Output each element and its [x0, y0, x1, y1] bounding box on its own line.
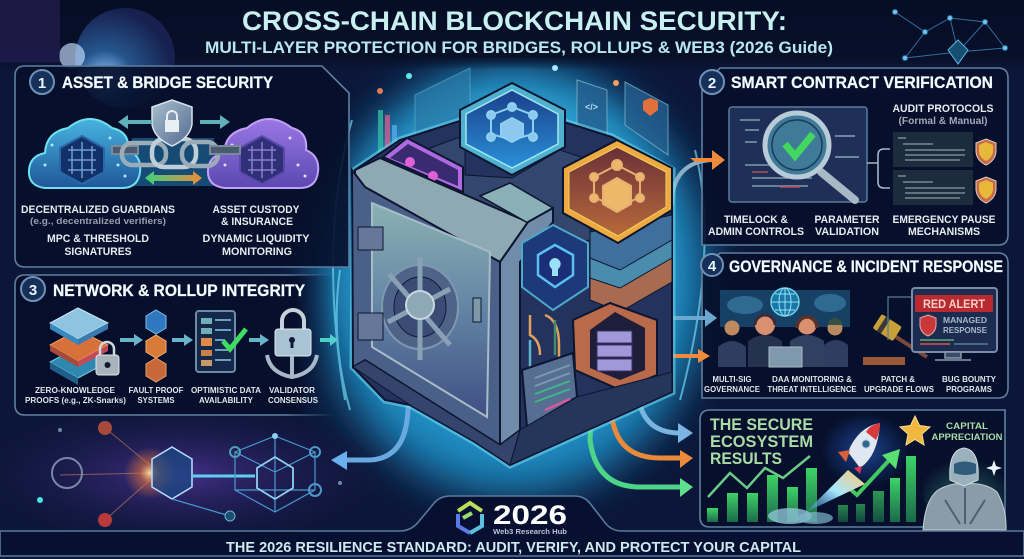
icon: gavel	[863, 314, 927, 365]
label: DAA monitoring and threat intelligence: THREAT INTELLIGENCE	[768, 384, 857, 394]
code box bottom	[893, 170, 973, 205]
label: emergency pause mechanisms: EMERGENCY PAUSE	[892, 214, 996, 226]
label: dynamic liquidity monitoring: MONITORING	[222, 246, 292, 258]
arrow: orange to results	[611, 405, 693, 468]
label: zero-knowledge proofs	[25, 385, 126, 405]
label: capital appreciation: APPRECIATION	[932, 432, 1003, 443]
label: timelock and admin controls: ADMIN CONTROLS	[708, 226, 804, 238]
label: decentralized guardians: (e.g., decentralized verifiers)	[30, 216, 166, 227]
hub name: Web3 Research Hub	[493, 527, 567, 536]
icon: red alert monitor	[888, 288, 997, 360]
decoration: background screens above vault	[377, 65, 668, 160]
icon: shield with padlock	[152, 100, 192, 146]
label: decentralized guardians: DECENTRALIZED GUARDIANS	[21, 204, 175, 216]
vault side	[500, 208, 553, 445]
decoration: background screens above vault: </>	[585, 102, 598, 112]
label: bug bounty programs	[942, 374, 996, 394]
wires	[530, 315, 559, 370]
label: fault proof systems: FAULT PROOF	[128, 385, 184, 395]
label: asset custody and insurance: ASSET CUSTODY	[212, 204, 300, 216]
arrow	[249, 334, 269, 346]
hinges	[358, 227, 481, 340]
bottom-left network art	[37, 421, 342, 527]
label: optimistic data availability	[191, 385, 261, 405]
heading: RESULTS	[710, 449, 782, 468]
logo	[458, 500, 567, 536]
icon: armored knight	[923, 448, 1006, 530]
icon: blue cloud	[29, 119, 140, 188]
heading: NETWORK & ROLLUP INTEGRITY	[53, 282, 305, 300]
badge 2: 2	[708, 75, 716, 92]
label: dynamic liquidity monitoring: DYNAMIC LIQUIDITY	[202, 233, 310, 245]
arrow	[120, 334, 143, 346]
label: bug bounty programs: PROGRAMS	[946, 384, 992, 394]
arrow: green to results	[583, 388, 693, 497]
arrow: blue to results	[640, 405, 693, 443]
label: patch and upgrade flows: PATCH &	[881, 374, 915, 384]
arrow: green and orange double	[145, 171, 202, 185]
label: audit protocols: AUDIT PROTOCOLS	[892, 103, 994, 115]
label: dynamic liquidity monitoring	[202, 233, 310, 258]
control panel	[522, 353, 577, 427]
badge 1: 1	[38, 75, 46, 92]
arrow: blue to bottom-left	[331, 405, 408, 470]
label: emergency pause mechanisms: MECHANISMS	[908, 226, 980, 238]
vault silhouette	[353, 105, 672, 465]
panel: smart contract verification	[700, 68, 1008, 245]
footer text: THE 2026 RESILIENCE STANDARD: AUDIT, VERIFY, AND PROTECT YOUR CAPITAL	[226, 539, 801, 556]
panel: governance and incident response	[701, 253, 1008, 398]
label: zero-knowledge proofs: PROOFS (e.g., ZK-Snarks)	[25, 395, 126, 405]
trend line left	[708, 456, 810, 497]
icon: shield top	[976, 139, 996, 165]
icon: checklist document	[196, 311, 246, 372]
title: CROSS-CHAIN BLOCKCHAIN SECURITY:	[242, 6, 787, 36]
label: capital appreciation	[932, 421, 1003, 443]
orange hexagon	[563, 140, 672, 243]
icon: star	[900, 416, 930, 445]
icon: padlock with anchor	[267, 310, 317, 377]
label: asset custody and insurance: & INSURANCE	[221, 216, 293, 228]
panel: asset and bridge security	[15, 66, 349, 267]
panel: secure ecosystem results	[700, 410, 1007, 530]
world map with globe	[720, 288, 850, 327]
label: timelock and admin controls: TIMELOCK &	[724, 214, 788, 226]
label: validator consensus: VALIDATOR	[269, 385, 316, 395]
block stack back	[400, 135, 590, 260]
label: DAA monitoring and threat intelligence	[768, 374, 857, 394]
label: multi-sig governance: GOVERNANCE	[704, 384, 760, 394]
icon: red alert monitor: RED ALERT	[923, 299, 985, 311]
label: fault proof systems	[128, 385, 184, 405]
dial	[382, 257, 458, 360]
arrow: panel 3 exit	[320, 334, 338, 346]
label: optimistic data availability: AVAILABILITY	[199, 395, 253, 405]
label: audit protocols: (Formal & Manual)	[898, 116, 988, 127]
footer bar	[0, 496, 1024, 556]
heading: SMART CONTRACT VERIFICATION	[731, 74, 993, 92]
label: zero-knowledge proofs: ZERO-KNOWLEDGE	[35, 385, 115, 395]
label: capital appreciation: CAPITAL	[946, 421, 988, 432]
keyhole hexagon	[522, 225, 588, 310]
icon: red alert monitor: RESPONSE	[943, 325, 987, 335]
icon: shield bottom	[976, 177, 996, 203]
arrow: orange to panel 4	[660, 349, 710, 363]
bracket	[867, 149, 890, 188]
icon: chain links	[112, 139, 240, 167]
badge 2	[700, 70, 724, 94]
arrow	[172, 334, 193, 346]
badge 3: 3	[29, 282, 37, 299]
label: DAA monitoring and threat intelligence: DAA MONITORING &	[772, 374, 852, 384]
label: bug bounty programs: BUG BOUNTY	[942, 374, 996, 384]
decoration: network top-right	[892, 10, 1008, 64]
arrow: right teal	[200, 115, 230, 129]
code window	[729, 107, 867, 202]
blue hexagon	[460, 83, 565, 175]
label: MPC and threshold signatures: MPC & THRESHOLD	[47, 233, 149, 245]
heading: ASSET & BRIDGE SECURITY	[62, 74, 273, 92]
label: patch and upgrade flows: UPGRADE FLOWS	[864, 384, 934, 394]
label: validator consensus	[268, 385, 318, 405]
bar chart	[707, 456, 916, 522]
label: parameter validation	[814, 214, 880, 238]
label: audit protocols	[892, 103, 994, 127]
label: multi-sig governance	[704, 374, 760, 394]
icon: red alert monitor: MANAGED	[943, 315, 987, 325]
badge 1	[30, 70, 54, 94]
icon: rocket with smoke	[768, 423, 880, 524]
icon: logo cube	[458, 503, 482, 533]
heading: THE SECURE	[710, 415, 813, 434]
base	[353, 360, 520, 465]
label: emergency pause mechanisms	[892, 214, 996, 238]
orange server housing	[573, 303, 657, 390]
label: parameter validation: PARAMETER	[814, 214, 880, 226]
layered strata under orange hex	[590, 215, 672, 312]
label: MPC and threshold signatures: SIGNATURES	[64, 246, 132, 258]
vault front door	[352, 170, 500, 445]
decoration: planet top-left	[0, 0, 175, 108]
badge 3	[21, 277, 45, 301]
label: validator consensus: CONSENSUS	[268, 395, 318, 405]
badge 4: 4	[708, 258, 717, 275]
label: timelock and admin controls	[708, 214, 804, 238]
icon: fault proof cubes	[146, 310, 166, 382]
label: decentralized guardians	[21, 204, 175, 227]
label: optimistic data availability: OPTIMISTIC DATA	[191, 385, 261, 395]
label: multi-sig governance: MULTI-SIG	[712, 374, 752, 384]
heading: ECOSYSTEM	[710, 432, 813, 451]
arrow: blue to panel 4	[670, 309, 717, 327]
arrow: left teal	[118, 115, 152, 129]
label: patch and upgrade flows	[864, 374, 934, 394]
label: MPC and threshold signatures	[47, 233, 149, 258]
panel: network and rollup integrity	[15, 275, 335, 415]
arrow: orange to panel 2	[672, 150, 725, 205]
purple chip	[383, 138, 463, 192]
year: 2026	[493, 500, 567, 530]
heading	[710, 415, 813, 468]
label: parameter validation: VALIDATION	[815, 226, 879, 238]
icon: layered stack with lock	[50, 308, 119, 385]
subtitle: MULTI-LAYER PROTECTION FOR BRIDGES, ROLLUPS & WEB3 (2026 Guide)	[205, 38, 833, 57]
badge 4	[701, 254, 723, 276]
trend arrow right	[830, 449, 900, 495]
vault top frame	[355, 158, 528, 262]
label: fault proof systems: SYSTEMS	[138, 395, 175, 405]
code box top	[893, 132, 973, 167]
vault: central illustration	[352, 83, 672, 465]
icon: purple cloud	[208, 119, 318, 188]
vault glow outline	[353, 105, 672, 465]
icon: magnifier with check	[765, 113, 855, 200]
icon: team of four operators	[718, 315, 848, 367]
label: asset custody and insurance	[212, 204, 300, 228]
